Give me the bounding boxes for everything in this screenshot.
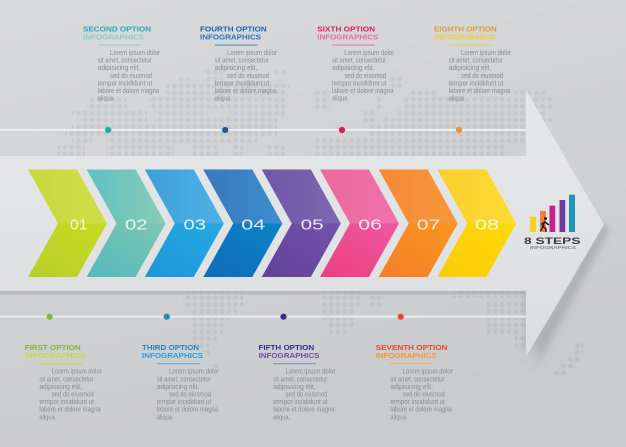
block: fourth option: sit amet, consectetur (215, 57, 269, 65)
block: first option (25, 343, 102, 421)
dot: first option (47, 314, 53, 320)
block: second option: INFOGRAPHICS (83, 32, 144, 42)
icon: runner (540, 217, 549, 232)
block: seventh option: Lorem ipsum dolor (403, 368, 453, 376)
chevron 02 (87, 170, 166, 277)
block: sixth option: sit amet, consectetur (332, 57, 387, 65)
block: second option: tempor incididunt ut (98, 79, 152, 87)
chevron 01: 01 (70, 217, 88, 234)
block: first option: labore et dolore magna (39, 406, 101, 414)
block: third option: INFOGRAPHICS (142, 351, 203, 360)
block: third option: tempor incididunt ut (157, 398, 211, 406)
block: eighth option: sed do eiusmod (461, 72, 503, 80)
chevron 06: 06 (358, 217, 382, 234)
block: seventh option: tempor incididunt ut (390, 398, 445, 406)
block: first option: tempor incididunt ut (39, 398, 94, 406)
block: first option: INFOGRAPHICS (25, 351, 86, 360)
arrow head shadow (526, 224, 610, 366)
chevron 07: 07 (417, 217, 440, 234)
chevron 05: 05 (301, 217, 324, 234)
block: eighth option: EIGHTH OPTION (434, 24, 497, 33)
chevron 06 (320, 170, 399, 277)
block: eighth option: tempor incididunt ut (449, 79, 503, 87)
block: sixth option: sed do eiusmod (344, 72, 386, 80)
block: second option: sed do eiusmod (110, 72, 152, 80)
band shadow (0, 290, 526, 294)
chevron 03 (145, 170, 224, 277)
dot: second option (105, 127, 111, 133)
block: fifth option: Lorem ipsum dolor (286, 368, 336, 376)
timeline: upper (0, 127, 526, 133)
block: first option: FIRST OPTION (25, 343, 81, 352)
block: fourth option: tempor incididunt ut (215, 79, 269, 87)
block: fourth option: FOURTH OPTION (200, 24, 267, 33)
timeline: lower (0, 314, 526, 320)
block: third option: Lorem ipsum dolor (169, 368, 220, 376)
block: fifth option: labore et dolore magna (273, 406, 335, 414)
block: fifth option: sit amet, consectetur (273, 375, 328, 383)
block: third option (142, 343, 220, 421)
block: second option: aliqua. (98, 95, 115, 103)
block: seventh option: sed do eiusmod (403, 391, 445, 399)
block: eighth option: Lorem ipsum dolor (461, 49, 512, 57)
block: seventh option: sit amet, consectetur (390, 375, 445, 383)
dot: eighth option (456, 127, 462, 133)
block: first option: sit amet, consectetur (39, 375, 94, 383)
chevron 04: 04 (241, 217, 265, 234)
block: sixth option: INFOGRAPHICS (317, 32, 378, 42)
chevron 05 (262, 170, 341, 277)
logo title: 8 STEPS (524, 236, 580, 247)
block: first option: Lorem ipsum dolor (52, 368, 102, 376)
block: seventh option: labore et dolore magna (390, 406, 452, 414)
block: seventh option: adipisicing elit, (390, 383, 433, 391)
block: sixth option: SIXTH OPTION (317, 24, 375, 33)
block: fourth option: aliqua. (215, 95, 232, 103)
block: third option: THIRD OPTION (142, 343, 199, 352)
block: fifth option: tempor incididunt ut (273, 398, 328, 406)
block: fourth option: labore et dolore magna (215, 87, 276, 95)
block: sixth option: Lorem ipsum dolor (344, 49, 395, 57)
block: fourth option: INFOGRAPHICS (200, 32, 261, 42)
block: second option (83, 24, 161, 103)
dot: fifth option (280, 314, 287, 320)
block: first option: sed do eiusmod (52, 391, 94, 399)
block: third option: aliqua. (157, 413, 174, 421)
world map dot pattern (58, 68, 583, 377)
chevron 04 (203, 170, 282, 277)
block: first option: aliqua. (39, 413, 56, 421)
block: fifth option: adipisicing elit, (273, 383, 316, 391)
chevron 03: 03 (184, 217, 206, 234)
block: seventh option: INFOGRAPHICS (376, 351, 437, 360)
block: fifth option: sed do eiusmod (286, 391, 328, 399)
block: fifth option (258, 343, 336, 421)
block: third option: labore et dolore magna (157, 406, 218, 414)
chevron 02: 02 (125, 217, 148, 234)
block: eighth option: INFOGRAPHICS (434, 32, 495, 42)
block: fourth option: Lorem ipsum dolor (227, 49, 278, 57)
block: eighth option: aliqua. (449, 95, 466, 103)
logo subtitle: INFOGRAPHICS (530, 245, 576, 250)
dot: sixth option (339, 127, 345, 133)
block: sixth option: aliqua. (332, 95, 349, 103)
block: second option: labore et dolore magna (98, 87, 159, 95)
block: eighth option: adipisicing elit, (449, 64, 491, 72)
block: sixth option (317, 24, 395, 103)
block: second option: adipisicing elit, (98, 64, 140, 72)
dot: third option (164, 314, 170, 320)
block: second option: sit amet, consectetur (98, 57, 152, 65)
chevron 01 (28, 170, 107, 277)
block: fifth option: INFOGRAPHICS (258, 351, 320, 360)
block: seventh option: aliqua. (390, 413, 407, 421)
block: eighth option: sit amet, consectetur (449, 57, 503, 65)
block: eighth option (434, 24, 512, 103)
block: fourth option: adipisicing elit, (215, 64, 257, 72)
block: first option: adipisicing elit, (39, 383, 82, 391)
block: sixth option: tempor incididunt ut (332, 79, 387, 87)
block: fourth option: sed do eiusmod (227, 72, 269, 80)
block: sixth option: labore et dolore magna (332, 87, 394, 95)
chevron 07 (379, 170, 458, 277)
block: seventh option (376, 343, 453, 421)
dot: seventh option (398, 314, 404, 320)
block: third option: sit amet, consectetur (157, 375, 211, 383)
block: second option: Lorem ipsum dolor (110, 49, 161, 57)
block: fourth option (200, 24, 278, 103)
block: second option: SECOND OPTION (83, 24, 151, 33)
chevron 08 (437, 170, 516, 277)
block: third option: sed do eiusmod (169, 391, 211, 399)
block: eighth option: labore et dolore magna (449, 87, 510, 95)
block: fifth option: aliqua. (273, 413, 290, 421)
block: seventh option: SEVENTH OPTION (376, 343, 447, 352)
dot: fourth option (222, 127, 228, 133)
block: third option: adipisicing elit, (157, 383, 199, 391)
logo: 8 steps (524, 195, 580, 250)
block: fifth option: FIFTH OPTION (258, 343, 314, 352)
big arrow (0, 90, 604, 357)
chevron 08: 08 (475, 217, 499, 234)
block: sixth option: adipisicing elit, (332, 64, 375, 72)
logo bar chart (530, 195, 575, 232)
